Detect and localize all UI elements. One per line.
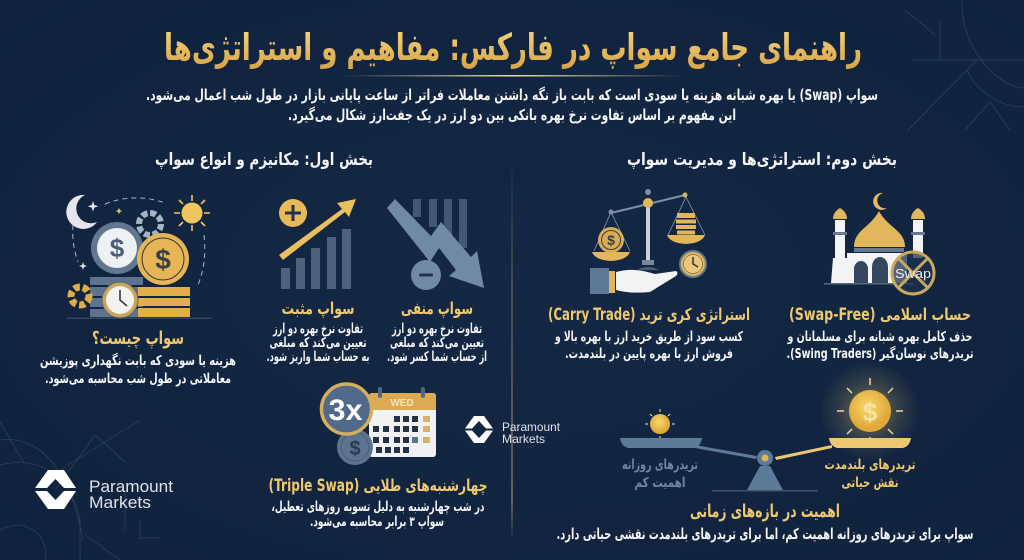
icon: calendar with 3x badge: WED (390, 398, 414, 409)
icon: scale on hand with clock: $ (607, 232, 615, 248)
heading: section one: بخش اول: مکانیزم و انواع سواپ (155, 150, 373, 170)
text block: positive swap: به حساب شما واریز شود. (266, 349, 370, 365)
text block: triple swap: در شب چهارشنبه به دلیل تسوبه روزهای تعطیل، (272, 499, 485, 515)
text block: carry trade (554, 329, 743, 362)
text block: what is swap: هزینه یا سودی که بابت نگهداری پوزیشن (40, 352, 236, 369)
text block: negative swap: تفاوت نرخ بهره دو ارز (391, 321, 482, 337)
panel: carry trade (548, 189, 750, 362)
text block: carry trade: فروش ارز با بهره پایین در بلندمدت. (565, 346, 733, 362)
panel: positive swap (266, 199, 370, 365)
logo: large Paramount Markets: Markets (89, 493, 151, 512)
label: day traders: تریدرهای روزانه (622, 457, 698, 473)
text block: triple swap: سواپ ۳ برابر محاسبه می‌شود. (310, 514, 444, 530)
intro paragraph (146, 86, 878, 124)
panel: what is swap (40, 195, 236, 387)
text block: positive swap: تعیین می‌کند که مبلغی (270, 335, 366, 351)
text block: carry trade: کسب سود از طریق خرید ارز با بهره بالا و (554, 329, 743, 345)
logo: small Paramount Markets (465, 416, 561, 446)
intro paragraph: این مفهوم بر اساس تفاوت نرخ بهره بانکی بین دو ارز در یک جفت‌ارز شکال می‌گیرد. (288, 106, 736, 124)
text block: negative swap: تعیین می‌کند که مبلغی (390, 335, 484, 351)
icon: mosque with crossed swap (824, 193, 934, 294)
label: day traders (622, 457, 698, 491)
heading: what is swap: سواپ چیست؟ (92, 328, 184, 349)
label: long-term traders (824, 457, 916, 491)
icon: coins, clock, sun and moon (66, 195, 212, 319)
icon: coins, clock, sun and moon: $ (110, 233, 125, 263)
logo: large Paramount Markets (35, 470, 173, 512)
logo: small Paramount Markets: Markets (502, 432, 545, 446)
panel: importance across time frames (556, 361, 974, 543)
text block: swap-free (786, 329, 974, 362)
heading: carry trade: استراتژی کری ترید (Carry Trade) (548, 305, 750, 325)
chart: balance scale with suns: $ (863, 397, 878, 427)
heading: section two: بخش دوم: استراتژی‌ها و مدیریت سواپ (627, 150, 897, 170)
label: day traders: اهمیت کم (634, 475, 686, 491)
panel: negative swap (387, 199, 487, 365)
heading: positive swap: سواپ مثبت (282, 299, 354, 319)
text block: negative swap: از حساب شما کسر شود. (387, 349, 487, 365)
label: long-term traders: تریدرهای بلندمدت (824, 457, 916, 473)
text block: what is swap (40, 352, 236, 387)
heading: triple swap: چهارشنبه‌های طلایی (Triple Swap) (268, 476, 488, 496)
text block: swap-free: تریدرهای نوسان‌گیر (Swing Traders). (786, 345, 974, 362)
icon: rising arrow with bars (279, 199, 356, 289)
text block: triple swap (272, 499, 485, 530)
panel: triple swap (268, 384, 488, 530)
panel: Islamic swap-free account (786, 193, 974, 362)
icon: scale on hand with clock (590, 189, 706, 294)
chart: balance scale with suns (620, 361, 920, 492)
logo: small Paramount Markets: Paramount (502, 420, 561, 434)
icon: coins, clock, sun and moon: $ (155, 244, 171, 275)
text block: positive swap: تفاوت نرخ بهره دو ارز (272, 321, 363, 337)
text block: negative swap (387, 321, 487, 365)
icon: falling arrow with bars (387, 199, 484, 290)
label: long-term traders: نقش حیاتی (842, 475, 898, 491)
heading: negative swap: سواپ منفی (401, 299, 473, 319)
logo: large Paramount Markets: Paramount (89, 477, 173, 496)
text block: what is swap: معاملاتی در طول شب محاسبه می‌شود. (45, 371, 231, 387)
icon: calendar with 3x badge: 3x (328, 394, 363, 427)
heading: swap-free: حساب اسلامی (Swap-Free) (789, 305, 971, 324)
icon: calendar with 3x badge: $ (349, 438, 361, 460)
icon: mosque with crossed swap: Swap (895, 266, 931, 281)
heading: importance: اهمیت در بازه‌های زمانی (690, 501, 840, 522)
icon: calendar with 3x badge (322, 384, 436, 465)
text block: positive swap (266, 321, 370, 365)
